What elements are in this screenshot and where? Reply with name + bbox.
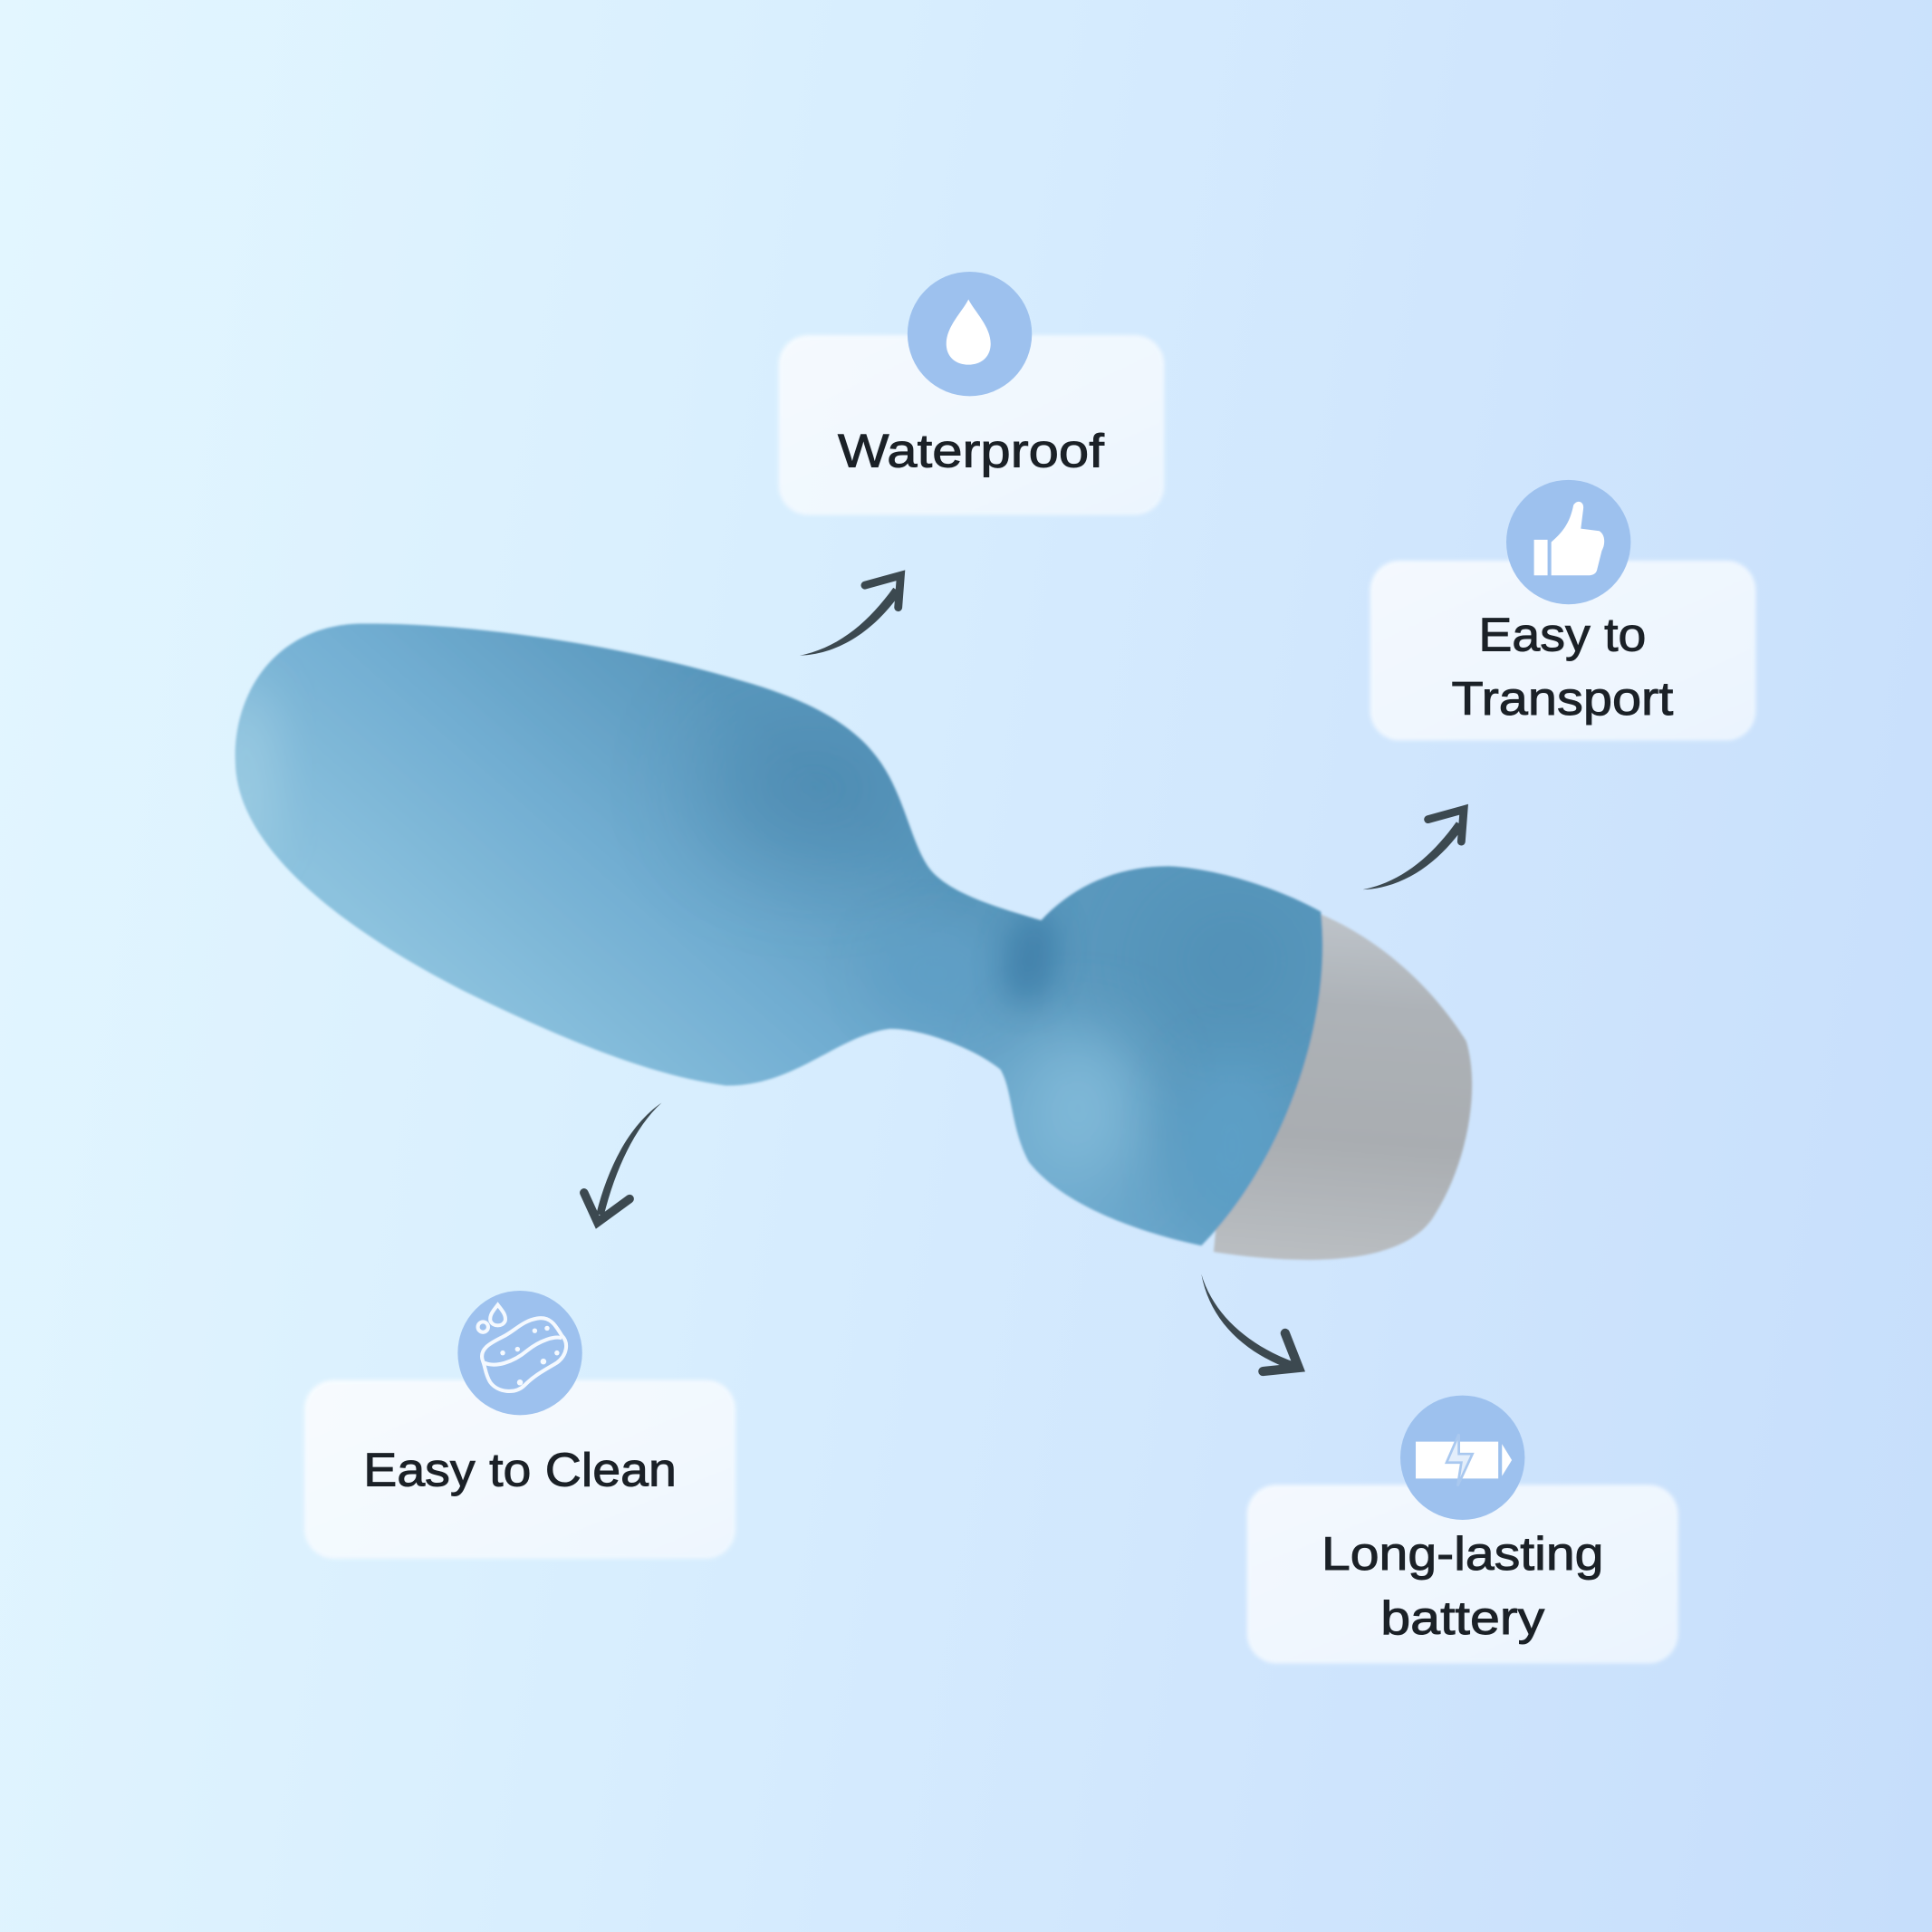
- label: Long-lasting battery: [1322, 1527, 1603, 1644]
- arrow: to Waterproof: [800, 575, 900, 656]
- arrow: to Easy to Clean: [584, 1102, 661, 1222]
- label: Easy to Transport: Easy to: [1478, 608, 1646, 660]
- icon: sponge and bubbles: [457, 1291, 582, 1415]
- panel: Easy to Transport: [1370, 480, 1755, 741]
- panel: Long-lasting battery: [1247, 1396, 1678, 1663]
- label: Waterproof: Waterproof: [838, 425, 1105, 477]
- icon: battery with bolt: [1400, 1396, 1524, 1520]
- label: Long-lasting battery: battery: [1380, 1591, 1544, 1644]
- label: Easy to Transport: [1451, 608, 1673, 725]
- arrow: to Easy to Transport: [1363, 810, 1464, 889]
- panel: Waterproof: [779, 272, 1165, 515]
- product grey cap: [1214, 906, 1472, 1260]
- icon: thumbs up: [1506, 480, 1630, 604]
- panel: Easy to Clean: [304, 1291, 735, 1559]
- label: Easy to Clean: Easy to Clean: [363, 1444, 677, 1496]
- label: Easy to Transport: Transport: [1451, 672, 1673, 725]
- icon: water drop: [908, 272, 1032, 396]
- product blue body: [234, 621, 1324, 1246]
- product illustration: [234, 621, 1473, 1261]
- label: Long-lasting battery: Long-lasting: [1322, 1527, 1603, 1580]
- arrow: to Long-lasting battery: [1201, 1274, 1299, 1371]
